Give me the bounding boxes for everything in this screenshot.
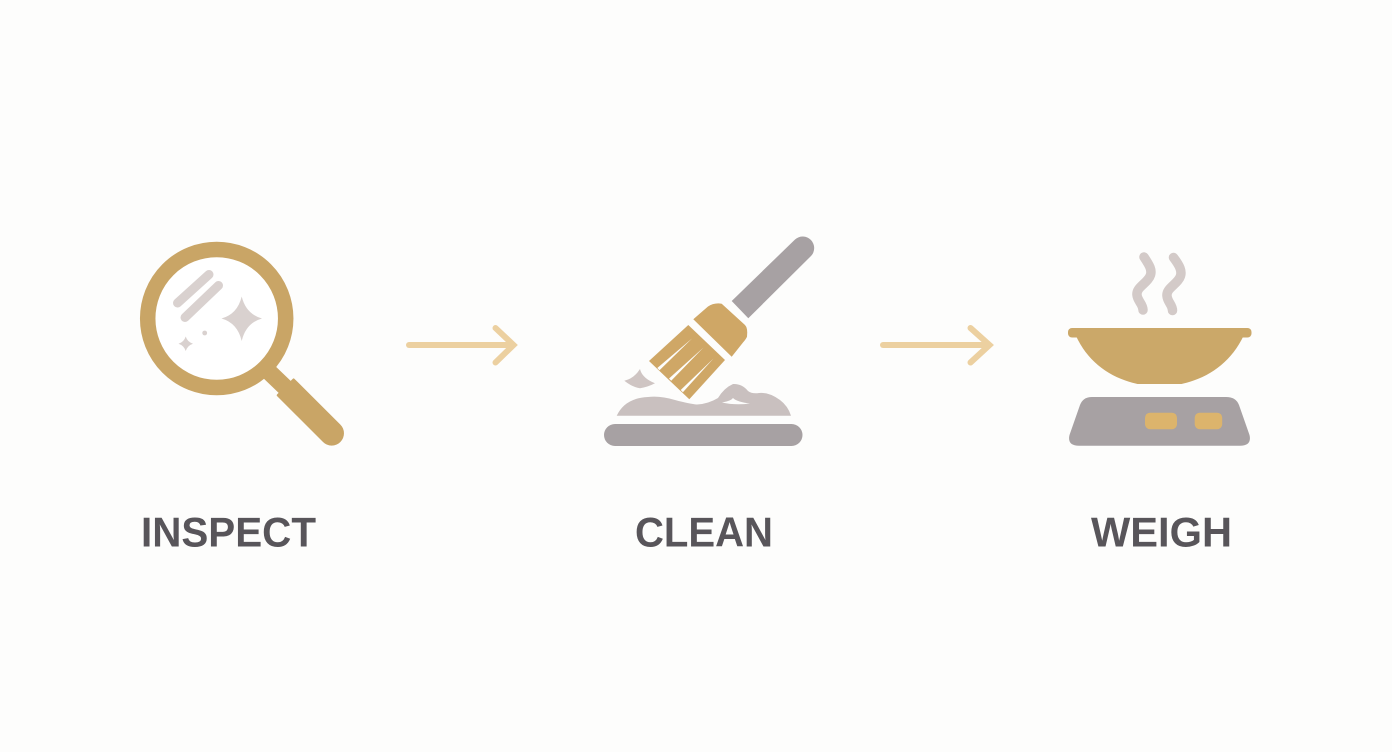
step: weigh [1068,257,1252,556]
handle grip [278,380,343,444]
steam wisps [1137,257,1181,310]
brush ferrule [693,303,747,357]
icon: magnifying glass [148,250,343,444]
small sparkle [178,336,193,351]
label: inspect: INSPECT [141,508,316,556]
arrow: clean to weigh [883,328,990,362]
glare lines [178,274,218,318]
step: clean [604,237,814,556]
step: inspect [141,250,343,556]
arrow: inspect to clean [409,328,514,362]
handle neck [265,368,290,392]
lens ring [148,250,286,388]
brush bristles [649,325,725,399]
label: clean: CLEAN [635,508,773,556]
scale base [1069,397,1250,446]
bristle gaps [657,338,714,392]
large sparkle [222,296,262,341]
bowl rim [1068,328,1252,338]
scale button right [1195,413,1222,429]
lens interior [155,257,278,380]
dust highlight [722,398,750,404]
scale button left [1145,413,1177,429]
icon: brush and dust [604,237,814,446]
dust pile [617,384,791,416]
tray [604,424,802,446]
brush handle [732,237,814,318]
dust fleck [624,369,655,388]
label: weigh: WEIGH [1091,508,1232,556]
bowl body [1076,336,1244,384]
icon: bowl on scale [1068,257,1252,446]
sparkle dot [202,331,207,335]
